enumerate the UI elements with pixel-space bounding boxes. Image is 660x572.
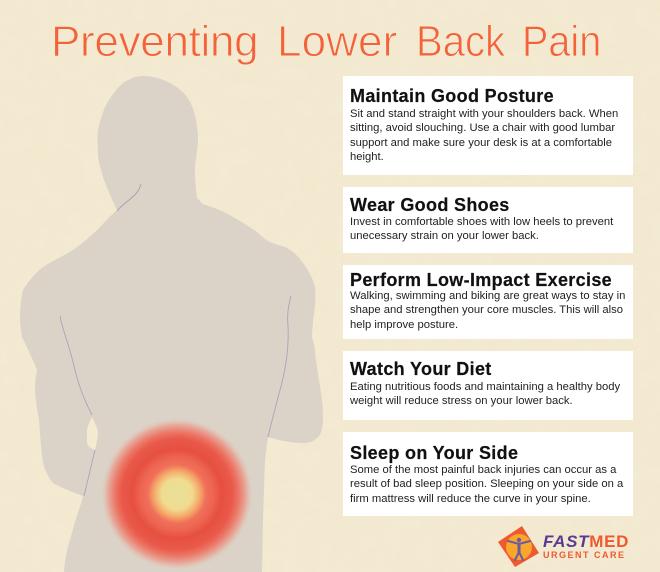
text block (350, 381, 620, 407)
text block: Walking, swimming and biking are great ways to stay in (350, 290, 625, 302)
text block: Sit and stand straight with your shoulders back. When (350, 108, 618, 120)
text block: result of bad sleep position. Sleeping on your side on a (350, 478, 623, 490)
text block: Eating nutritious foods and maintaining a healthy body (350, 381, 620, 393)
text block (350, 290, 625, 331)
text block: Some of the most painful back injuries can occur as a (350, 464, 616, 476)
title: Preventing (51, 17, 258, 66)
title: Pain (522, 17, 601, 66)
panel: wear good shoes (343, 187, 633, 253)
text block: firm mattress will reduce the curve in your spine. (350, 493, 591, 505)
text block: sitting, avoid slouching. Use a chair with good lumbar (350, 122, 615, 134)
title (51, 17, 601, 66)
text block: unecessary strain on your lower back. (350, 230, 539, 242)
left body contour (60, 316, 95, 496)
gap between arm and waist (87, 417, 98, 450)
text block (350, 216, 614, 242)
panel: perform low-impact exercise (343, 265, 633, 339)
title: Back (416, 17, 505, 66)
title: Lower (277, 17, 397, 66)
text block (350, 108, 618, 163)
panel: maintain good posture (343, 76, 633, 175)
text block: help improve posture. (350, 319, 458, 331)
text block: support and make sure your desk is at a comfortable (350, 137, 612, 149)
right body contour (268, 296, 291, 437)
heading: Wear Good Shoes (350, 195, 510, 215)
text block: weight will reduce stress on your lower back. (350, 395, 573, 407)
wordmark: FASTMED (543, 532, 629, 551)
text block: shape and strengthen your core muscles. This will also (350, 304, 623, 316)
silhouette body (20, 76, 323, 572)
pain spot (100, 417, 254, 571)
text block: height. (350, 151, 384, 163)
panel: watch your diet (343, 351, 633, 420)
heading: Perform Low-Impact Exercise (350, 270, 612, 290)
tagline: URGENT CARE (543, 550, 626, 560)
text block (350, 464, 624, 505)
panel: sleep on your side (343, 432, 633, 516)
text block: Invest in comfortable shoes with low heels to prevent (350, 216, 613, 228)
heading: Watch Your Diet (350, 359, 492, 379)
logo: FastMed Urgent Care (498, 526, 629, 567)
heading: Sleep on Your Side (350, 443, 518, 463)
heading: Maintain Good Posture (350, 86, 554, 106)
icon: diamond with figure (498, 526, 539, 567)
neck line (117, 184, 141, 211)
